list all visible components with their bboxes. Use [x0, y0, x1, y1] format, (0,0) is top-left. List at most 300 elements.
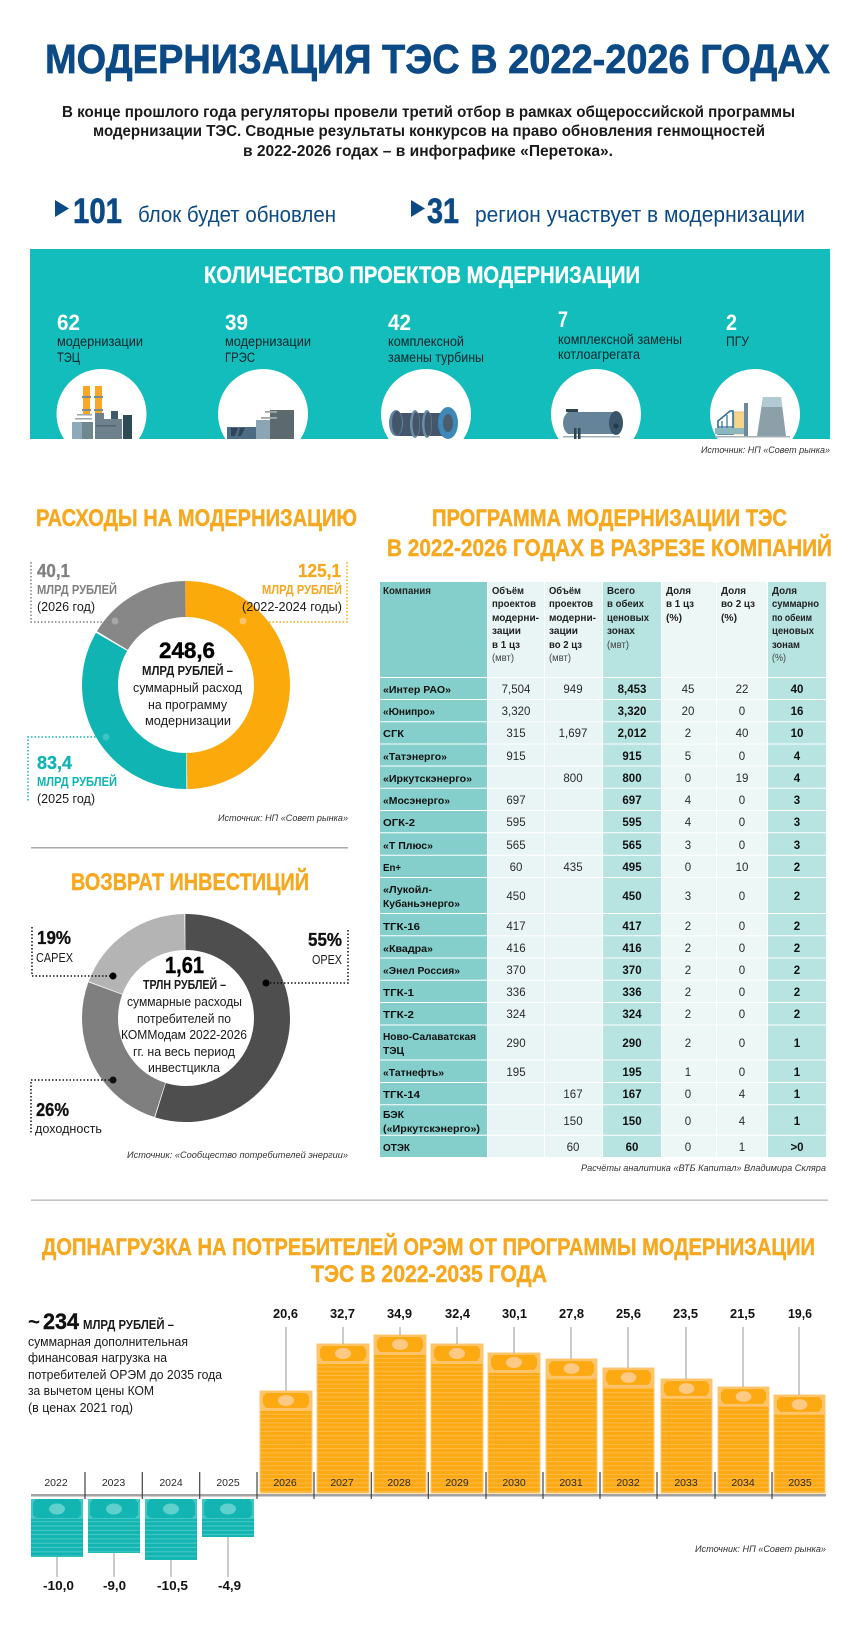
callout: 83.4: (2025 год) [37, 791, 95, 806]
row: Novo-Salavatskaya TETs [383, 1031, 801, 1057]
donut centre text: return on investment: суммарные расходы [127, 994, 242, 1009]
row: Irkutskenergo: 800 [563, 773, 583, 785]
row: T Plus: «Т Плюс» [383, 840, 433, 852]
donut centre text: spending: на программу [148, 697, 227, 712]
row: Tatenergo: 915 [506, 751, 526, 763]
row: TGK-16: 417 [622, 921, 642, 933]
row: SGK: 315 [506, 728, 526, 740]
bar 2025: -4,9 [218, 1578, 241, 1593]
row: Irkutskenergo: 800 [622, 773, 642, 785]
callout: 83.4: МЛРД РУБЛЕЙ [37, 774, 117, 789]
row: Enel Russia: 2 [685, 965, 691, 977]
row: T Plus: 3 [794, 840, 800, 852]
stat: 101 blocks [55, 192, 336, 231]
text block: 234 bn: МЛРД РУБЛЕЙ – [83, 1317, 174, 1332]
source: panel: Источник: НП «Совет рынка» [701, 445, 830, 456]
row: TGK-14: ТГК-14 [383, 1089, 420, 1101]
row: Mosenergo: 697 [506, 795, 526, 807]
intro text [62, 104, 795, 160]
item: 7 boilers: котлоагрегата [558, 346, 640, 362]
row: TGK-1: 2 [794, 987, 800, 999]
text block: 234 bn: ~ [28, 1309, 40, 1334]
heading: consumer burden: ТЭС В 2022-2035 ГОДА [311, 1261, 547, 1288]
bar 2032 [603, 1306, 654, 1493]
row: TGK-14 [383, 1089, 801, 1101]
bar 2035 [774, 1306, 825, 1493]
bar 2025 [202, 1477, 254, 1593]
row: T Plus: 3 [685, 840, 691, 852]
callout: 40.1 [31, 561, 118, 624]
bar 2022 [31, 1477, 83, 1593]
table header: (мвт) [492, 653, 514, 664]
bar 2029: 2029 [445, 1477, 469, 1489]
table header: Доля [772, 585, 797, 597]
row: OGK-2: ОГК-2 [383, 817, 415, 829]
bar 2023: 2023 [102, 1477, 125, 1489]
bar 2030: 2030 [502, 1477, 526, 1489]
bar 2028: 34,9 [387, 1306, 412, 1321]
stat: 101 blocks: блок будет обновлен [138, 202, 336, 227]
row: Mosenergo: 4 [685, 795, 692, 807]
callout: 26%: доходность [35, 1121, 102, 1136]
row: BEK: 4 [739, 1116, 746, 1128]
row: Tatenergo: 4 [794, 751, 801, 763]
row: Kvadra: 0 [739, 943, 745, 955]
row: Irkutskenergo: 4 [794, 773, 801, 785]
row: TGK-16: ТГК-16 [383, 921, 420, 933]
row: Tatenergo: 5 [685, 751, 691, 763]
row: Kvadra [383, 943, 800, 955]
table header: проектов [549, 598, 593, 610]
bar 2026: 20,6 [273, 1306, 298, 1321]
row: OGK-2: 3 [794, 817, 800, 829]
table header: суммарно [772, 598, 819, 610]
text block: 234 bn: 234 [43, 1309, 80, 1334]
item: 42 turbines: 42 [388, 310, 411, 335]
row: TGK-14: 167 [563, 1089, 583, 1101]
row: Tatneft: 0 [739, 1067, 745, 1079]
row: TGK-14: 1 [794, 1089, 801, 1101]
row: BEK: («Иркутскэнерго») [383, 1123, 480, 1135]
bar 2022: 2022 [44, 1477, 68, 1489]
item: 2 CCGT [726, 310, 749, 349]
callout: 125.1: 125,1 [298, 561, 341, 581]
row: Kvadra: 2 [794, 943, 800, 955]
row: SGK: 10 [791, 728, 803, 740]
row: TGK-1 [383, 987, 800, 999]
callout: 26%: 26% [36, 1100, 69, 1120]
donut centre text: return on investment: 1,61 [165, 952, 204, 978]
item: 7 boilers: 7 [558, 307, 568, 332]
row: Lukoil-Kubanenergo: Кубаньэнерго» [383, 898, 460, 910]
row: Lukoil-Kubanenergo: «Лукойл- [383, 884, 433, 896]
row: En+: 60 [510, 862, 522, 874]
row: Lukoil-Kubanenergo: 3 [685, 891, 691, 903]
bar 2034: 21,5 [730, 1306, 755, 1321]
row: TGK-1: 336 [622, 987, 642, 999]
bar 2033: 23,5 [673, 1306, 698, 1321]
row: TGK-14: 0 [685, 1089, 691, 1101]
row: Unipro: 3,320 [618, 706, 646, 718]
item: 39 GRES: ГРЭС [225, 349, 255, 365]
row: TGK-16: 2 [685, 921, 691, 933]
row: Novo-Salavatskaya TETs: 0 [739, 1038, 745, 1050]
callout: 26% [31, 1076, 116, 1136]
row: Inter RAO: «Интер РАО» [383, 684, 451, 696]
donut centre text: return on investment: инвестцикла [148, 1060, 221, 1075]
table header: модерни- [492, 612, 539, 624]
icon: boiler [551, 369, 641, 439]
row: OTEK: 1 [739, 1142, 745, 1154]
row: TGK-2: ТГК-2 [383, 1009, 414, 1021]
bar 2029: 32,4 [445, 1306, 471, 1321]
row: Tatenergo: 915 [622, 751, 642, 763]
table header: (%) [772, 653, 786, 664]
row: TGK-16: 2 [794, 921, 800, 933]
callout: 40.1: (2026 год) [37, 599, 95, 614]
item: 2 CCGT: ПГУ [726, 333, 749, 349]
row: BEK: 150 [622, 1116, 642, 1128]
bar 2027: 32,7 [330, 1306, 355, 1321]
row: TGK-16: 0 [739, 921, 745, 933]
row: Tatneft: 195 [506, 1067, 526, 1079]
row: Lukoil-Kubanenergo: 2 [794, 891, 800, 903]
bar 2031 [546, 1306, 597, 1493]
axis [31, 1472, 826, 1499]
bar 2025: 2025 [216, 1477, 240, 1489]
row: OGK-2: 0 [739, 817, 745, 829]
table header: в 1 цз [666, 598, 694, 610]
icon: GRES plant [218, 369, 308, 439]
bar 2031: 2031 [559, 1477, 583, 1489]
row: BEK: 150 [563, 1116, 583, 1128]
bar 2030: 30,1 [502, 1306, 527, 1321]
row: Mosenergo: «Мосэнерго» [383, 795, 450, 807]
callout: 83.4: 83,4 [37, 753, 72, 773]
callout: 125.1 [240, 561, 347, 624]
table header: (мвт) [607, 640, 629, 651]
row: Enel Russia [383, 965, 800, 977]
bar 2024: 2024 [159, 1477, 183, 1489]
item: 2 CCGT: 2 [726, 310, 737, 335]
row: TGK-2 [383, 1009, 800, 1021]
row: TGK-14: 4 [739, 1089, 746, 1101]
bar 2024: -10,5 [157, 1578, 188, 1593]
bar 2035: 19,6 [788, 1306, 812, 1321]
table header: Всего [607, 585, 635, 597]
row: Enel Russia: 2 [794, 965, 800, 977]
table header: проектов [492, 598, 536, 610]
table header: зонах [607, 625, 635, 637]
item: 62 TETs: ТЭЦ [57, 349, 80, 365]
bar 2023 [88, 1477, 140, 1593]
stat: 31 regions [411, 192, 805, 231]
row: T Plus: 565 [506, 840, 526, 852]
callout: 125.1: МЛРД РУБЛЕЙ [262, 582, 342, 597]
bar 2030 [488, 1306, 540, 1493]
row: TGK-2: 2 [685, 1009, 691, 1021]
row: Tatneft [383, 1067, 801, 1079]
row: Unipro: 16 [791, 706, 803, 718]
bar 2028: 2028 [387, 1477, 411, 1489]
donut centre text: spending: МЛРД РУБЛЕЙ – [142, 663, 233, 678]
table header: по обеим [772, 612, 812, 624]
table header: ценовых [607, 612, 649, 624]
row: En+: 0 [685, 862, 691, 874]
table header: Компания [383, 585, 431, 597]
row: TGK-1: 2 [685, 987, 691, 999]
row: Enel Russia: 0 [739, 965, 745, 977]
row: SGK: 40 [736, 728, 748, 740]
row: Tatenergo [383, 751, 801, 763]
callout: 40.1: 40,1 [37, 561, 70, 581]
row: Mosenergo: 697 [622, 795, 642, 807]
bar 2026 [260, 1306, 312, 1493]
item: 62 TETs [57, 310, 143, 365]
donut centre text: return on investment: ТРЛН РУБЛЕЙ – [143, 977, 226, 992]
table header: зации [549, 625, 578, 637]
text block: 234 bn: финансовая нагрузка на [28, 1351, 167, 1365]
row: OTEK: 60 [567, 1142, 579, 1154]
row: Lukoil-Kubanenergo: 450 [622, 891, 642, 903]
row: Unipro: 0 [739, 706, 745, 718]
stat: 31 regions: 31 [427, 192, 459, 231]
table header: (мвт) [549, 653, 571, 664]
callout: 55% [262, 930, 348, 986]
row: T Plus: 565 [622, 840, 642, 852]
donut centre text: spending: суммарный расход [133, 680, 242, 695]
text block: 234 bn [28, 1309, 222, 1415]
row: Novo-Salavatskaya TETs: ТЭЦ [383, 1045, 404, 1057]
icon: TETs plant [56, 369, 146, 439]
text block: 234 bn: суммарная дополнительная [28, 1335, 188, 1349]
table header: Объём [549, 585, 581, 597]
row: En+: En+ [383, 862, 401, 874]
row: Tatneft: 195 [622, 1067, 642, 1079]
row: TGK-2: 0 [739, 1009, 745, 1021]
row: OGK-2: 595 [622, 817, 642, 829]
row: Kvadra: 416 [506, 943, 526, 955]
bar 2035: 2035 [788, 1477, 812, 1489]
heading: company table [387, 505, 832, 562]
donut centre text: spending [133, 638, 242, 728]
intro text: В конце прошлого года регуляторы провели третий отбор в рамках общероссийской программы [62, 104, 795, 121]
item: 42 turbines: комплексной [388, 333, 464, 349]
icon: CCGT plant [710, 369, 800, 439]
row: BEK: БЭК [383, 1109, 405, 1121]
item: 42 turbines: замены турбины [388, 349, 484, 365]
bar 2031: 27,8 [559, 1306, 584, 1321]
row: Tatenergo: «Татэнерго» [383, 751, 447, 763]
bar 2027: 2027 [330, 1477, 354, 1489]
donut centre text: return on investment [121, 952, 247, 1075]
icon: turbine [381, 369, 471, 439]
heading: return on investment: ВОЗВРАТ ИНВЕСТИЦИЙ [71, 868, 309, 896]
row: TGK-16: 417 [506, 921, 526, 933]
table header: модерни- [549, 612, 596, 624]
row: Tatneft: 1 [794, 1067, 801, 1079]
item: 39 GRES: 39 [225, 310, 248, 335]
row: Irkutskenergo [383, 773, 801, 785]
row: OTEK: 60 [626, 1142, 638, 1154]
donut chart: return on investment [100, 932, 272, 1104]
row: SGK: 1,697 [559, 728, 587, 740]
row: Novo-Salavatskaya TETs: Ново-Салаватская [383, 1031, 476, 1043]
source: table: Расчёты аналитика «ВТБ Капитал» Владимира Скляра [581, 1163, 826, 1174]
bar 2032: 25,6 [616, 1306, 641, 1321]
bar 2028 [374, 1306, 426, 1493]
row: En+ [383, 862, 800, 874]
callout: 19%: CAPEX [36, 950, 73, 965]
source: bar chart: Источник: НП «Совет рынка» [695, 1544, 826, 1555]
row: Inter RAO: 40 [791, 684, 803, 696]
row: OTEK: >0 [790, 1142, 804, 1154]
row: TGK-2: 2 [794, 1009, 800, 1021]
row: OGK-2: 595 [506, 817, 526, 829]
table header: в 1 цз [492, 639, 520, 651]
table header: ценовых [772, 625, 814, 637]
row: TGK-1: 0 [739, 987, 745, 999]
bar 2032: 2032 [616, 1477, 640, 1489]
item: 42 turbines [388, 310, 484, 365]
row: BEK [383, 1109, 801, 1135]
row: Irkutskenergo: 19 [736, 773, 748, 785]
row: T Plus [383, 840, 800, 852]
row: Enel Russia: «Энел Россия» [383, 965, 460, 977]
bar chart: consumer burden [31, 1306, 826, 1593]
table header: во 2 цз [721, 598, 755, 610]
row: Lukoil-Kubanenergo: 450 [506, 891, 526, 903]
row: Mosenergo: 0 [739, 795, 745, 807]
callout: 125.1: (2022-2024 годы) [242, 599, 342, 614]
row: En+: 10 [736, 862, 748, 874]
heading: spending: РАСХОДЫ НА МОДЕРНИЗАЦИЮ [36, 505, 357, 532]
row: Lukoil-Kubanenergo: 0 [739, 891, 745, 903]
row: Inter RAO [383, 684, 803, 696]
row: Mosenergo [383, 795, 800, 807]
row: Enel Russia: 370 [622, 965, 642, 977]
stat: 101 blocks: 101 [73, 192, 122, 231]
row: Tatneft: 1 [685, 1067, 691, 1079]
bar 2027 [317, 1306, 369, 1493]
row: Inter RAO: 45 [682, 684, 694, 696]
callout: 19%: 19% [37, 928, 71, 948]
bar 2034: 2034 [731, 1477, 755, 1489]
row: OGK-2 [383, 817, 800, 829]
row: Unipro: «Юнипро» [383, 706, 435, 718]
stat: 31 regions: регион участвует в модернизации [475, 202, 805, 227]
row: TGK-2: 324 [622, 1009, 642, 1021]
donut chart: spending [100, 599, 272, 771]
panel: project counts [30, 249, 830, 459]
item: 39 GRES: модернизации [225, 333, 311, 349]
item: 7 boilers: комплексной замены [558, 331, 682, 347]
row: Kvadra: «Квадра» [383, 943, 433, 955]
bar 2033: 2033 [674, 1477, 698, 1489]
row: Enel Russia: 370 [506, 965, 526, 977]
table header: зации [492, 625, 521, 637]
row: Unipro: 3,320 [502, 706, 530, 718]
row: BEK: 1 [794, 1116, 801, 1128]
donut centre text: spending: 248,6 [159, 638, 215, 663]
table header: в обеих [607, 598, 644, 610]
table: companies [380, 582, 826, 1157]
row: Irkutskenergo: «Иркутскэнерго» [383, 773, 472, 785]
item: 62 TETs: модернизации [57, 333, 143, 349]
text block: 234 bn: потребителей ОРЭМ до 2035 года [28, 1368, 222, 1382]
source: spending: Источник: НП «Совет рынка» [218, 813, 348, 824]
text block: 234 bn: за вычетом цены КОМ [28, 1384, 154, 1398]
row: Novo-Salavatskaya TETs: 290 [622, 1038, 642, 1050]
row: Irkutskenergo: 0 [685, 773, 691, 785]
donut centre text: return on investment: гг. на весь период [133, 1044, 235, 1059]
row: Inter RAO: 8,453 [618, 684, 646, 696]
row: TGK-1: ТГК-1 [383, 987, 414, 999]
panel heading: КОЛИЧЕСТВО ПРОЕКТОВ МОДЕРНИЗАЦИИ [204, 262, 640, 289]
row: Novo-Salavatskaya TETs: 290 [506, 1038, 526, 1050]
row: TGK-2: 324 [506, 1009, 526, 1021]
bar 2033 [661, 1306, 712, 1493]
bar 2024 [145, 1477, 197, 1593]
row: Inter RAO: 7,504 [502, 684, 531, 696]
callout: 83.4 [28, 734, 117, 806]
row: Kvadra: 416 [622, 943, 642, 955]
row: SGK: 2,012 [618, 728, 646, 740]
row: Lukoil-Kubanenergo [383, 884, 800, 910]
table header: зонам [772, 639, 800, 651]
row: Tatenergo: 0 [739, 751, 745, 763]
row: TGK-14: 167 [622, 1089, 642, 1101]
row: OTEK: 0 [685, 1142, 691, 1154]
row: Inter RAO: 949 [563, 684, 583, 696]
table header: Объём [492, 585, 524, 597]
row: OTEK [383, 1142, 804, 1154]
row: Kvadra: 2 [685, 943, 691, 955]
item: 62 TETs: 62 [57, 310, 80, 335]
bar 2029 [431, 1306, 483, 1493]
row: OTEK: ОТЭК [383, 1142, 411, 1154]
row: TGK-16 [383, 921, 800, 933]
row: SGK: 2 [685, 728, 691, 740]
row: Unipro [383, 706, 803, 718]
heading: company table: ПРОГРАММА МОДЕРНИЗАЦИИ ТЭС [432, 505, 787, 532]
table header: (%) [721, 612, 737, 624]
row: T Plus: 0 [739, 840, 745, 852]
bar 2023: -9,0 [103, 1578, 126, 1593]
row: Mosenergo: 3 [794, 795, 800, 807]
table header: (%) [666, 612, 682, 624]
donut centre text: spending: модернизации [145, 713, 231, 728]
bar 2022: -10,0 [43, 1578, 74, 1593]
row: TGK-1: 336 [506, 987, 526, 999]
table header [383, 585, 819, 664]
donut centre text: return on investment: КОММодам 2022-2026 [121, 1027, 247, 1042]
row: Inter RAO: 22 [736, 684, 748, 696]
source: return on investment: Источник: «Сообщество потребителей энергии» [127, 1150, 348, 1161]
item: 39 GRES [225, 310, 311, 365]
row: OGK-2: 4 [685, 817, 692, 829]
text block: 234 bn: (в ценах 2021 год) [28, 1401, 133, 1415]
row: Tatneft: «Татнефть» [383, 1067, 444, 1079]
callout: 19% [32, 927, 116, 980]
intro text: в 2022-2026 годах – в инфографике «Перетока». [243, 143, 613, 160]
table header: во 2 цз [549, 639, 582, 651]
table header: Доля [666, 585, 691, 597]
callout: 40.1: МЛРД РУБЛЕЙ [37, 582, 117, 597]
row: BEK: 0 [685, 1116, 691, 1128]
item: 7 boilers [558, 307, 682, 362]
row: En+: 2 [794, 862, 800, 874]
